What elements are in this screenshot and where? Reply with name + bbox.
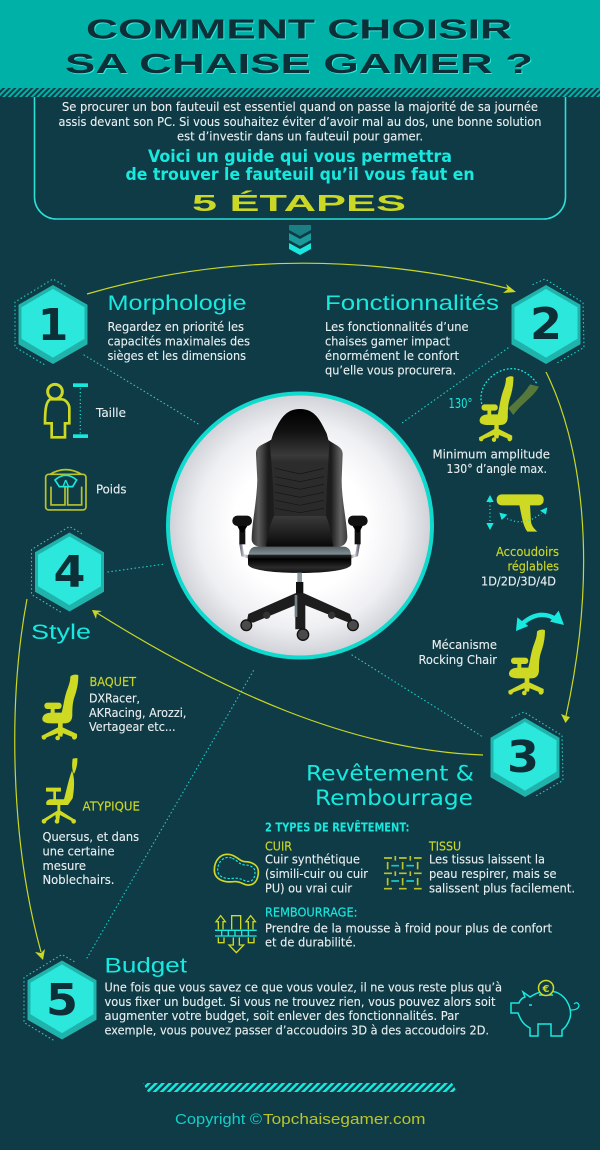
title: SA CHAISE GAMER ? bbox=[65, 48, 533, 79]
label: 130 degrees: 130° bbox=[448, 397, 472, 412]
step 5 text: Budget bbox=[104, 955, 502, 1038]
block: bucket style: Vertagear etc... bbox=[89, 720, 176, 734]
icon: bucket chair bbox=[41, 675, 78, 740]
title bbox=[65, 14, 533, 79]
block: leather: (simili-cuir ou cuir bbox=[265, 867, 368, 881]
intro text bbox=[58, 100, 542, 144]
block: padding: et de durabilité. bbox=[265, 936, 356, 950]
step 5 badge: 5 bbox=[46, 975, 78, 1026]
header band bbox=[0, 0, 600, 88]
footer hatch bar bbox=[143, 1083, 457, 1092]
icon: fabric bbox=[384, 856, 422, 889]
block: bucket style: BAQUET bbox=[90, 675, 137, 689]
block: fabric: peau respirer, mais se bbox=[429, 867, 556, 881]
step 3 heading: Revêtement & bbox=[306, 762, 474, 786]
block: leather: CUIR bbox=[265, 840, 292, 854]
block: atypical style: Quersus, et dans bbox=[42, 830, 139, 844]
intro panel bbox=[34, 97, 566, 219]
guide heading: de trouver le fauteuil qu’il vous faut en bbox=[126, 165, 474, 184]
step 2 text: Fonctionnalités: énormément le confort bbox=[325, 349, 459, 363]
5 étapes: 5 ÉTAPES bbox=[192, 189, 406, 216]
dotted connectors bbox=[84, 348, 508, 958]
step 5 text: Budget: vous fixer un budget. Si vous ne trouvez rien, vous pouvez alors soit bbox=[104, 995, 496, 1009]
block: padding: Prendre de la mousse à froid pour plus de confort bbox=[265, 922, 552, 936]
step 2 text: Fonctionnalités bbox=[325, 292, 499, 378]
block: bucket style bbox=[89, 675, 186, 734]
label: minimum amplitude bbox=[432, 448, 550, 476]
icon: atypical chair bbox=[42, 758, 77, 824]
step 2 text: Fonctionnalités: qu’elle vous procurera. bbox=[325, 364, 456, 378]
icon: leather bbox=[214, 854, 258, 885]
step 5 text: Budget: augmenter votre budget, soit enlever des fonctionnalités. Par bbox=[104, 1009, 459, 1023]
step 1 text: Morphologie: Regardez en priorité les bbox=[108, 320, 244, 334]
step 4 heading: Style: Style bbox=[31, 621, 91, 644]
guide heading bbox=[126, 147, 474, 184]
arrow: step 3 to 4 bbox=[92, 610, 483, 755]
label: armrests: Accoudoirs bbox=[496, 545, 559, 559]
icon: rocking chair bbox=[508, 611, 564, 695]
block: fabric: Les tissus laissent la bbox=[429, 853, 545, 867]
block: leather: Cuir synthétique bbox=[265, 853, 360, 867]
title: COMMENT CHOISIR bbox=[86, 14, 512, 44]
label: armrests: réglables bbox=[508, 560, 559, 574]
label: armrests: 1D/2D/3D/4D bbox=[481, 575, 556, 589]
block: atypical style: Noblechairs. bbox=[42, 873, 114, 887]
step 3 badge: 3 bbox=[507, 732, 539, 783]
icon: height bbox=[45, 383, 88, 438]
block: fabric: salissent plus facilement. bbox=[429, 882, 575, 896]
block: bucket style: DXRacer, bbox=[89, 692, 140, 706]
step 1 badge: 1 bbox=[38, 300, 68, 351]
arrow: step 2 to 3 bbox=[546, 372, 584, 723]
step 1 text: Morphologie bbox=[108, 292, 250, 363]
guide heading: Voici un guide qui vous permettra bbox=[148, 147, 452, 166]
icon: adjustable armrest bbox=[486, 494, 547, 532]
copyright: Copyright © bbox=[175, 1111, 262, 1128]
chair illustration bbox=[232, 409, 368, 640]
copyright: Topchaisegamer.com bbox=[263, 1111, 426, 1128]
step 1 badge bbox=[15, 279, 88, 365]
heading: two covering types: 2 TYPES DE REVÊTEMENT: bbox=[265, 819, 410, 834]
step 5 badge bbox=[24, 954, 96, 1040]
step 2 badge bbox=[512, 279, 584, 364]
step 5 text: Budget: Une fois que vous savez ce que vous voulez, il ne vous reste plus qu’à bbox=[104, 981, 502, 995]
step 1 text: Morphologie: Morphologie bbox=[108, 292, 246, 315]
step 3 heading bbox=[306, 762, 474, 810]
label: rocking mechanism: Mécanisme bbox=[432, 638, 497, 652]
block: leather: PU) ou vrai cuir bbox=[265, 882, 352, 896]
step 1 text: Morphologie: capacités maximales des bbox=[108, 334, 250, 348]
icon: chevrons bbox=[289, 225, 311, 255]
step 3 badge bbox=[490, 712, 563, 797]
label: Taille: Taille bbox=[95, 406, 126, 420]
arrow: step 4 to 5 bbox=[15, 599, 45, 960]
step 5 text: Budget: exemple, vous pouvez passer d’accoudoirs 3D à des accoudoirs 2D. bbox=[104, 1024, 489, 1038]
copyright bbox=[175, 1111, 426, 1128]
icon: piggy bank bbox=[511, 980, 579, 1036]
step 2 text: Fonctionnalités: Fonctionnalités bbox=[325, 292, 499, 315]
block: atypical style: une certaine bbox=[42, 844, 114, 858]
label: rocking mechanism bbox=[418, 638, 497, 667]
block: fabric: TISSU bbox=[428, 840, 461, 854]
step 4 badge bbox=[32, 526, 104, 612]
intro text: est d’investir dans un fauteuil pour gamer. bbox=[177, 130, 423, 144]
block: atypical style: mesure bbox=[42, 859, 86, 873]
label: Poids: Poids bbox=[96, 483, 126, 497]
block: atypical style: ATYPIQUE bbox=[82, 800, 140, 814]
step 4 badge: 4 bbox=[54, 547, 86, 598]
step 5 text: Budget: Budget bbox=[104, 955, 187, 978]
block: padding: REMBOURRAGE: bbox=[265, 906, 358, 920]
icon: padding bbox=[215, 916, 257, 953]
arrow: step 1 to 2 bbox=[87, 263, 516, 294]
step 1 text: Morphologie: sièges et les dimensions bbox=[108, 349, 246, 363]
label: minimum amplitude: Minimum amplitude bbox=[432, 448, 550, 462]
step 2 badge: 2 bbox=[530, 299, 562, 350]
block: atypical style bbox=[42, 800, 140, 887]
block: bucket style: AKRacing, Arozzi, bbox=[89, 706, 186, 720]
step 2 text: Fonctionnalités: Les fonctionnalités d’une bbox=[325, 320, 468, 334]
label: rocking mechanism: Rocking Chair bbox=[418, 653, 497, 667]
step 3 heading: Rembourrage bbox=[315, 786, 473, 810]
intro text: assis devant son PC. Si vous souhaitez éviter d’avoir mal au dos, une bonne solution bbox=[58, 115, 542, 129]
central chair disc bbox=[168, 394, 432, 658]
intro text: Se procurer un bon fauteuil est essentiel quand on passe la majorité de sa journée bbox=[62, 100, 538, 114]
icon: recline 130 degrees bbox=[479, 369, 539, 442]
label: armrests bbox=[481, 545, 559, 589]
block: fabric bbox=[428, 840, 575, 896]
icon: piggy bank: € bbox=[542, 984, 550, 995]
block: leather bbox=[265, 840, 368, 896]
icon: weight scale bbox=[46, 470, 86, 510]
step 2 text: Fonctionnalités: chaises gamer impact bbox=[325, 334, 450, 348]
block: padding bbox=[265, 906, 552, 950]
label: minimum amplitude: 130° d’angle max. bbox=[446, 462, 547, 476]
